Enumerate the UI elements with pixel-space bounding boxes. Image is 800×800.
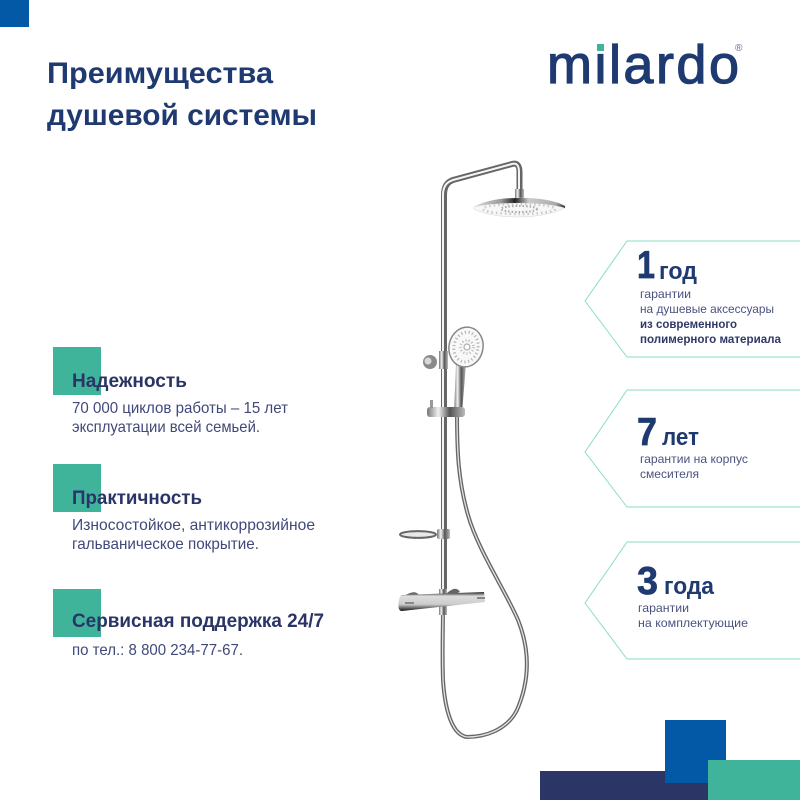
callout: 1 year: на душевые аксессуары [640,302,774,316]
callout: 1 year: полимерного материала [640,332,781,346]
callout: 3 years: 3 [637,560,658,603]
benefit: practicality: гальваническое покрытие. [72,536,259,553]
callout: 3 years: на комплектующие [638,616,748,630]
hand shower [445,324,487,413]
benefit: service support [53,589,324,659]
callout: 1 year: из современного [640,317,737,331]
logo: milardo: ® [735,43,743,54]
rail and arm [444,164,520,590]
shower system [398,164,565,737]
callout: 7 years: гарантии на корпус [640,452,748,466]
benefit: reliability: эксплуатации всей семьей. [72,419,260,436]
callout: 3 years: гарантии [638,601,689,615]
benefit: service support: Сервисная поддержка 24/7 [72,611,324,632]
benefit: practicality [53,464,315,553]
callout: 7 years: смесителя [640,467,699,481]
callout: 3 years: года [664,573,715,600]
callout: 7 years: лет [662,424,699,451]
callout: 7 years [585,390,800,507]
slider [427,400,465,417]
logo: milardo: milardo [547,35,739,95]
title [47,57,317,132]
benefit: reliability: Надежность [72,371,187,392]
callout: 1 year: 1 [637,244,655,287]
callout: 7 years: 7 [637,411,657,454]
overhead shower head [474,189,565,217]
soap dish [400,529,450,539]
corner square [0,0,29,27]
wall elbow [423,351,448,369]
benefit: practicality: Практичность [72,488,202,509]
bottom right colour blocks [540,720,800,800]
callout: 1 year: год [659,258,697,285]
callout: 1 year [585,241,800,357]
title: Преимущества [47,57,274,90]
benefit: practicality: Износостойкое, антикоррозийное [72,517,315,534]
benefit: reliability: 70 000 циклов работы – 15 лет [72,400,289,417]
hose [443,413,527,737]
benefit: reliability [53,347,289,436]
title: душевой системы [47,99,317,132]
benefit: service support: по тел.: 8 800 234-77-67. [72,642,243,659]
thermostatic mixer [398,589,485,615]
callout: 3 years [585,542,800,659]
callout: 1 year: гарантии [640,287,691,301]
